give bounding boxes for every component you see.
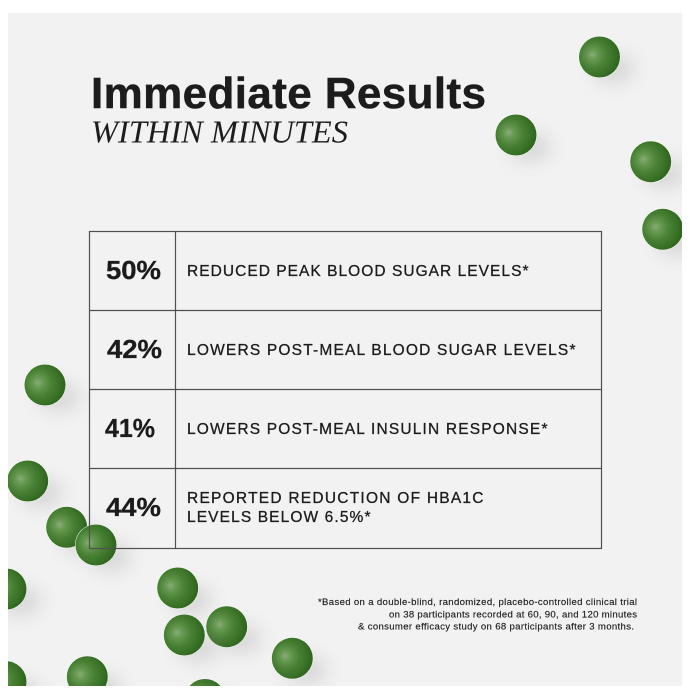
footnote: *Based on a double-blind, randomized, placebo-controlled clinical trial: [318, 597, 637, 608]
subtitle: WITHIN MINUTES: [91, 114, 348, 150]
row 4: [106, 490, 484, 526]
row 3: [105, 415, 548, 443]
row 2: 42%: [107, 336, 162, 364]
row 1: [106, 257, 528, 285]
row 1: 50%: [106, 257, 161, 285]
row 1: REDUCED PEAK BLOOD SUGAR LEVELS*: [187, 263, 528, 280]
table grid: [90, 232, 602, 548]
row 4: 44%: [106, 494, 161, 522]
footnote: on 38 participants recorded at 60, 90, and 120 minutes: [389, 610, 637, 620]
row 4: REPORTED REDUCTION OF HBA1C: [187, 490, 484, 507]
row 2: [107, 336, 576, 364]
row 2: LOWERS POST-MEAL BLOOD SUGAR LEVELS*: [187, 342, 576, 359]
results table: [90, 232, 602, 548]
title: Immediate Results: [91, 69, 486, 118]
footnote: & consumer efficacy study on 68 participants after 3 months.: [358, 622, 634, 632]
row 4: LEVELS BELOW 6.5%*: [187, 509, 370, 526]
row 3: 41%: [105, 415, 155, 443]
footnote: [318, 597, 637, 632]
row 3: LOWERS POST-MEAL INSULIN RESPONSE*: [187, 421, 548, 438]
